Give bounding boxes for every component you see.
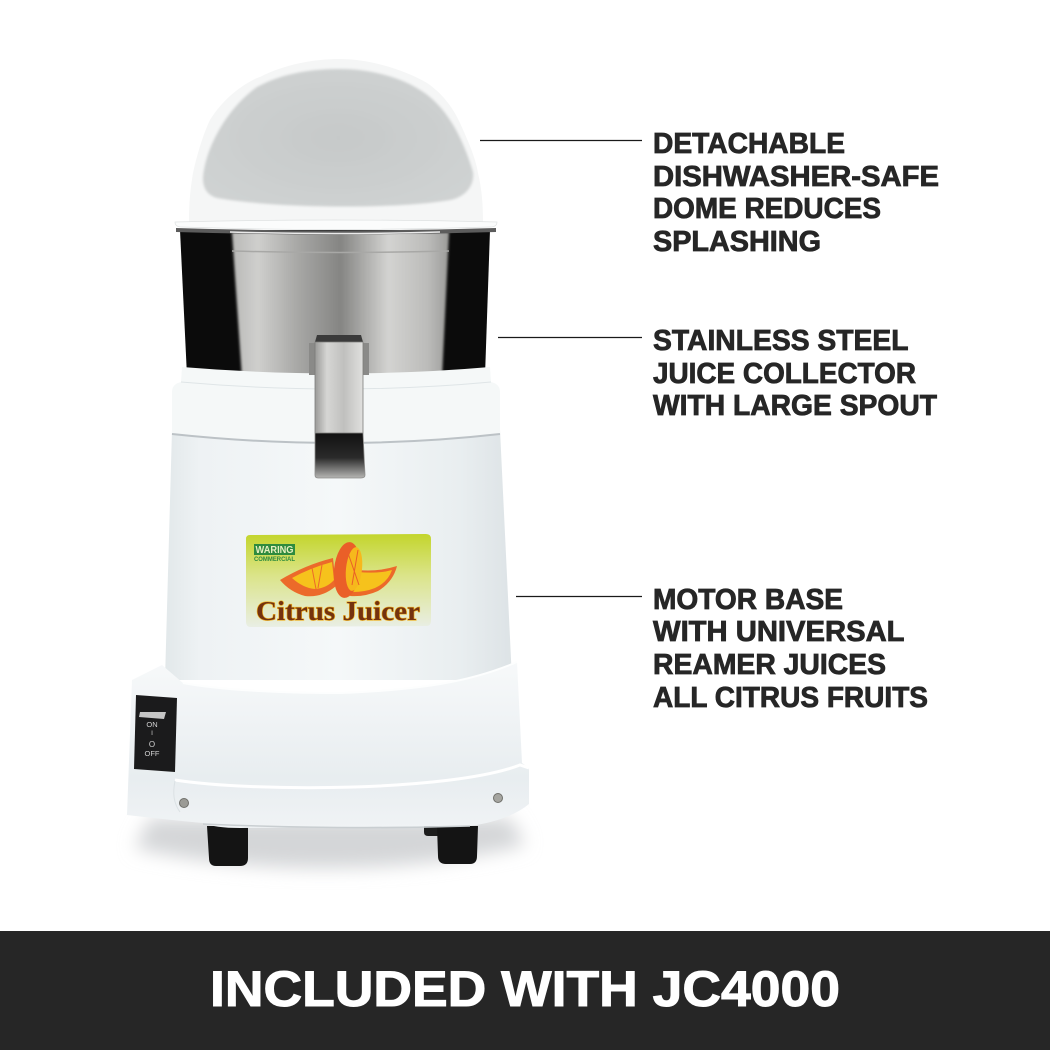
power switch: I	[151, 730, 153, 737]
callout: dome	[480, 128, 947, 258]
callout text: ALL CITRUS FRUITS	[653, 682, 928, 714]
callout text: WITH LARGE SPOUT	[653, 390, 938, 422]
Citrus Juicer wordmark: Citrus Juicer	[256, 596, 420, 626]
power switch: ON	[146, 720, 158, 729]
callout text: DETACHABLE	[653, 128, 845, 160]
callout text: MOTOR BASE	[653, 584, 843, 616]
stainless steel juice collector bowl	[176, 228, 496, 378]
leader line	[498, 336, 642, 338]
callout text: WITH UNIVERSAL	[653, 616, 904, 648]
floor shadow	[135, 818, 525, 868]
callout text: SPLASHING	[653, 226, 821, 258]
callout text: DISHWASHER-SAFE	[653, 161, 939, 193]
callout text: JUICE COLLECTOR	[653, 358, 916, 390]
callout text: DOME REDUCES	[653, 193, 881, 225]
detachable dome lid	[175, 59, 497, 230]
screws	[180, 798, 188, 808]
product label: Waring Citrus Juicer: COMMERCIAL	[254, 557, 295, 563]
motor base body	[127, 367, 529, 828]
leader line	[480, 140, 642, 142]
banner heading: INCLUDED WITH JC4000	[210, 961, 840, 1017]
power switch: OFF	[144, 749, 160, 758]
product illustration: citrus juicer	[127, 59, 529, 868]
collar	[172, 367, 500, 443]
product label: Waring Citrus Juicer: WARING	[256, 545, 294, 556]
leader line	[516, 596, 642, 598]
power switch: O	[149, 740, 155, 749]
callout: juice collector	[498, 325, 938, 422]
callout text: STAINLESS STEEL	[653, 325, 908, 357]
Waring logo	[254, 544, 295, 555]
orange slices	[280, 558, 336, 596]
callout text: REAMER JUICES	[653, 649, 886, 681]
base skirt with switch housing	[127, 662, 529, 828]
power switch	[134, 695, 177, 772]
rubber feet	[207, 824, 478, 866]
product label: Waring Citrus Juicer	[246, 534, 431, 627]
spout	[309, 335, 369, 478]
callout: motor base	[516, 584, 928, 714]
footer banner	[0, 931, 1050, 1050]
